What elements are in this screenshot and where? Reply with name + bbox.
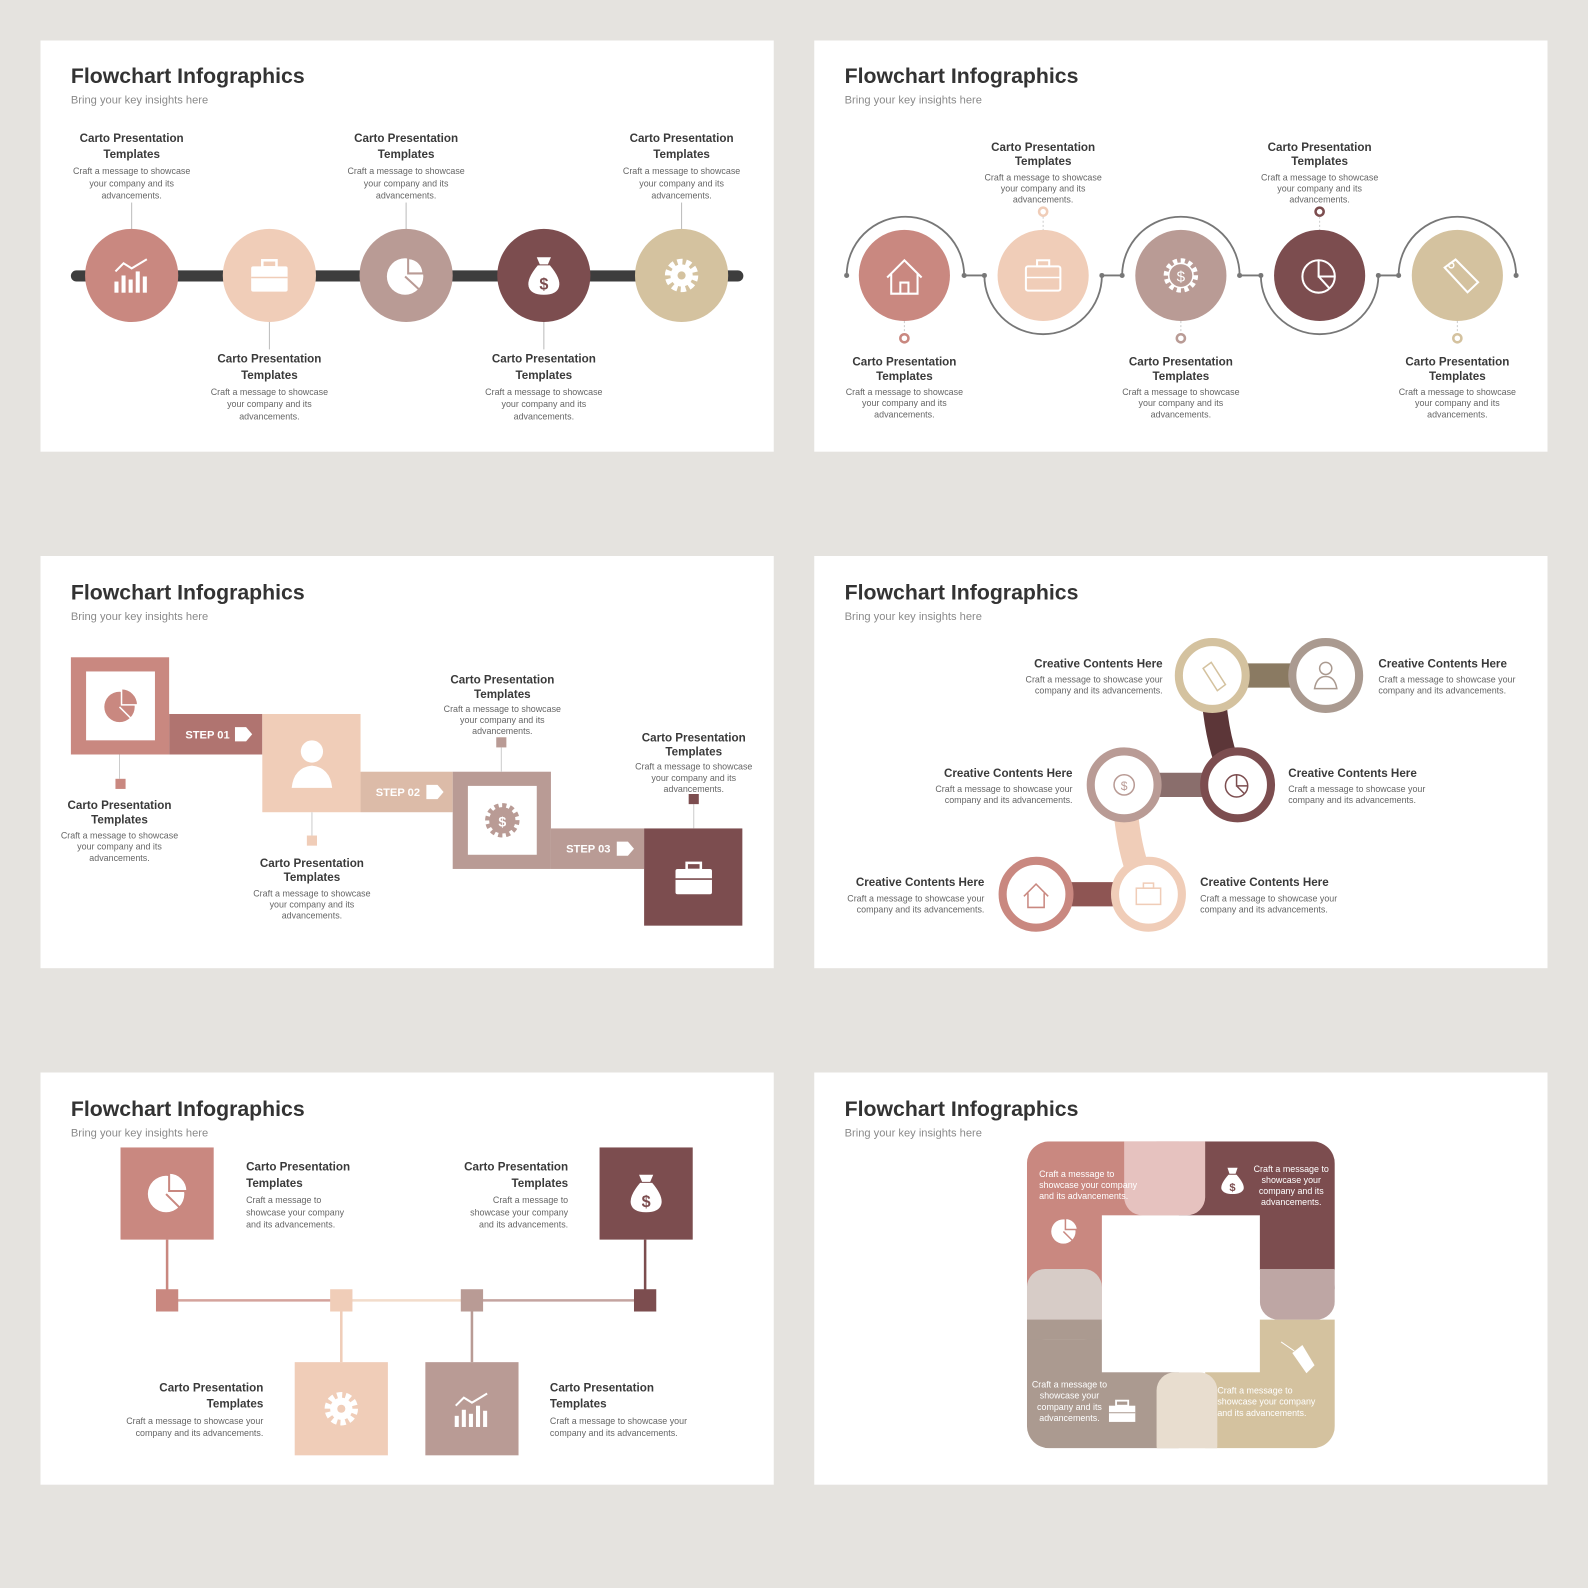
text blocks: Carto Presentation (991, 141, 1095, 154)
panel: slide 4 chain circles: Craft a message to showcase your (1288, 784, 1425, 794)
connectors (1036, 676, 1326, 894)
text blocks: advancements. (376, 190, 436, 200)
panel: slide 5 branch timeline: company and its advancements. (136, 1428, 263, 1438)
text blocks: Templates (474, 688, 531, 701)
text blocks: company and its advancements. (1035, 686, 1163, 696)
text blocks: your company and its (460, 715, 545, 725)
text blocks: Craft a message to showcase your (1026, 675, 1163, 685)
markers (900, 208, 1461, 342)
text blocks: Craft a message to showcase (846, 387, 963, 397)
text blocks: Templates (284, 871, 340, 884)
icon: gear ring (1091, 751, 1158, 818)
text: top-left (1039, 1169, 1138, 1201)
text blocks: Carto Presentation (642, 731, 746, 744)
text blocks: advancements. (651, 190, 712, 200)
text blocks: Templates (516, 369, 572, 382)
text blocks: and its advancements. (246, 1219, 335, 1229)
text blocks: Craft a message to showcase (253, 888, 371, 898)
text: top-right: company and its (1259, 1186, 1324, 1196)
text blocks: Carto Presentation (80, 132, 184, 145)
text blocks: company and its advancements. (857, 904, 984, 914)
text blocks: Carto Presentation (1129, 356, 1233, 369)
text blocks: Templates (1153, 370, 1209, 383)
text: bottom-right: showcase your company (1217, 1397, 1316, 1407)
text blocks: your company and its (77, 842, 162, 852)
text: bottom-left: showcase your (1040, 1391, 1099, 1401)
text blocks: Craft a message to showcase (211, 387, 328, 397)
title: Flowchart Infographics (71, 1097, 305, 1121)
panel: slide 2 wave circles (814, 41, 1547, 452)
text blocks: Carto Presentation (67, 799, 172, 812)
panel: slide 5 branch timeline: Carto Presentation (464, 1161, 568, 1174)
text blocks: Carto Presentation (246, 1161, 350, 1174)
text: top-right: advancements. (1261, 1197, 1321, 1207)
text blocks: Templates (378, 148, 434, 161)
text blocks: advancements. (239, 411, 300, 421)
icon: gear square (453, 772, 551, 869)
text blocks: Craft a message to showcase your (935, 784, 1073, 794)
connector lines (167, 1240, 645, 1362)
text blocks: Creative Contents Here (856, 876, 985, 889)
icon: chart circle (85, 229, 178, 322)
panel: slide 5 branch timeline (41, 1073, 774, 1485)
icon: gear square: $ (498, 814, 506, 830)
text blocks: Templates (1429, 370, 1486, 383)
text blocks: Templates (550, 1398, 607, 1411)
text blocks: Carto Presentation (354, 132, 458, 145)
panel: slide 6 square cycle (814, 1073, 1547, 1485)
text blocks: your company and its (1139, 398, 1224, 408)
icon: money square: $ (642, 1193, 651, 1211)
step bars (169, 714, 644, 869)
text: bottom-left: company and its (1037, 1402, 1102, 1412)
text: top-right (1254, 1164, 1329, 1207)
icon: tag ring (1179, 642, 1246, 709)
icon: house circle (859, 230, 950, 321)
text blocks: advancements. (1151, 409, 1211, 419)
panel: slide 4 chain circles: company and its advancements. (1200, 904, 1328, 914)
text blocks: Craft a message to showcase (1399, 387, 1516, 397)
text: bottom-left: advancements. (1039, 1413, 1100, 1423)
text blocks: your company and its (364, 178, 449, 188)
connectors (120, 747, 694, 836)
text: top-right: showcase your (1262, 1175, 1321, 1185)
panel: slide 5 branch timeline: Craft a message to (493, 1195, 568, 1205)
text blocks (847, 657, 1163, 914)
text blocks (246, 1161, 687, 1438)
text blocks: your company and its (1001, 183, 1086, 193)
panel: slide 5 branch timeline: showcase your company (470, 1207, 569, 1217)
text blocks: Carto Presentation (217, 353, 321, 366)
text blocks: Craft a message to showcase your (847, 893, 984, 903)
text blocks: Carto Presentation (1405, 356, 1509, 369)
text blocks: Craft a message to showcase your (550, 1416, 687, 1426)
icon: pie square (121, 1147, 214, 1240)
panel: slide 4 chain circles: company and its advancements. (1288, 795, 1416, 805)
text blocks: company and its advancements. (945, 795, 1073, 805)
text blocks: showcase your company (246, 1207, 345, 1217)
text blocks: Templates (1291, 155, 1348, 168)
subtitle: Bring your key insights here (71, 94, 208, 106)
icon: gear ring: $ (1121, 779, 1128, 793)
panel: slide 5 branch timeline: Carto Presentation (159, 1382, 263, 1395)
panel: slide 5 branch timeline: and its advancements. (479, 1219, 568, 1229)
text: top-left: showcase your company (1039, 1180, 1138, 1190)
text blocks: advancements. (1289, 195, 1350, 205)
text: top-left: Craft a message to (1039, 1169, 1114, 1179)
icon: pie (1051, 1218, 1078, 1244)
title: Flowchart Infographics (845, 581, 1078, 605)
icon: briefcase ring (1115, 861, 1182, 928)
subtitle: Bring your key insights here (845, 1127, 982, 1139)
text: top-left: and its advancements. (1039, 1191, 1128, 1201)
text blocks: Templates (241, 369, 298, 382)
panel: slide 4 chain circles: company and its advancements. (1378, 686, 1506, 696)
text blocks: advancements. (874, 409, 935, 419)
text: bottom-left: Craft a message to (1032, 1379, 1107, 1389)
text blocks: Carto Presentation (1268, 141, 1372, 154)
panel: slide 1 circles timeline (41, 41, 774, 452)
icon: pie circle (1274, 230, 1365, 321)
icon: briefcase circle (998, 230, 1089, 321)
title: Flowchart Infographics (71, 581, 305, 605)
icon: house ring (1003, 861, 1069, 928)
text blocks: Craft a message to showcase (1261, 172, 1378, 182)
text blocks: Craft a message to showcase (623, 166, 740, 176)
icon: gear dollar circle (1135, 230, 1226, 321)
timeline bar (71, 270, 743, 282)
icon: gear circle (635, 229, 728, 322)
text blocks: Craft a message to showcase (1122, 387, 1240, 397)
text blocks: Carto Presentation (492, 353, 596, 366)
text blocks: your company and its (1277, 183, 1362, 193)
subtitle: Bring your key insights here (845, 611, 982, 623)
text: bottom-right (1217, 1386, 1316, 1418)
icon: person ring (1292, 642, 1359, 709)
step bars: STEP 03 (566, 844, 610, 856)
text blocks: advancements. (1013, 195, 1073, 205)
subtitle: Bring your key insights here (71, 1127, 208, 1139)
icon: money bag: $ (1229, 1182, 1236, 1194)
text blocks: Creative Contents Here (944, 767, 1073, 780)
icon: pie square (71, 657, 169, 755)
text blocks: Templates (246, 1177, 303, 1190)
panel: slide 5 branch timeline: Templates (207, 1398, 263, 1411)
text blocks: Templates (103, 148, 160, 161)
text blocks: Templates (665, 746, 722, 759)
text blocks: Craft a message to showcase (635, 762, 752, 772)
text blocks: your company and its (639, 178, 724, 188)
icon: briefcase square (644, 828, 742, 926)
text: bottom-right: and its advancements. (1217, 1408, 1306, 1418)
icon: money bag circle (497, 229, 590, 322)
text blocks (73, 132, 740, 421)
text blocks: advancements. (282, 911, 342, 921)
subtitle: Bring your key insights here (71, 611, 208, 623)
text blocks: Carto Presentation (852, 356, 956, 369)
text blocks: advancements. (101, 190, 162, 200)
wave line (847, 217, 1516, 334)
panel: slide 4 chain circles (814, 556, 1547, 968)
text blocks: advancements. (514, 411, 574, 421)
icon: gear dollar circle: $ (1177, 269, 1186, 286)
text blocks: your company and its (502, 399, 587, 409)
panel: slide 4 chain circles: Craft a message to showcase your (1200, 893, 1337, 903)
text blocks: Carto Presentation (550, 1382, 654, 1395)
text blocks: your company and its (1415, 398, 1500, 408)
text blocks: Craft a message to (246, 1195, 321, 1205)
text blocks: advancements. (664, 784, 724, 794)
panel: slide 5 branch timeline: Templates (512, 1177, 568, 1190)
text blocks: your company and its (89, 178, 175, 188)
icon: briefcase circle (223, 229, 316, 322)
icon: pie ring (1204, 751, 1271, 818)
text blocks: Craft a message to showcase (347, 166, 465, 176)
text blocks: your company and its (227, 399, 312, 409)
title: Flowchart Infographics (71, 64, 305, 88)
text blocks: your company and its (651, 773, 737, 783)
text blocks: Craft a message to showcase (61, 831, 178, 841)
panel: slide 4 chain circles: Craft a message to showcase your (1378, 675, 1516, 685)
text blocks: your company and its (270, 899, 355, 909)
text blocks: advancements. (89, 853, 150, 863)
text blocks (846, 141, 1516, 419)
panel: slide 4 chain circles: Creative Contents Here (1200, 876, 1329, 889)
text: bottom-left (1032, 1379, 1107, 1423)
title: Flowchart Infographics (845, 1097, 1078, 1121)
panel: slide 4 chain circles: Creative Contents Here (1378, 657, 1507, 670)
text blocks: Craft a message to showcase (73, 166, 190, 176)
subtitle: Bring your key insights here (845, 94, 982, 106)
text blocks: Carto Presentation (630, 132, 734, 145)
icon: money square (600, 1147, 693, 1240)
cycle frame (1027, 1124, 1335, 1463)
icon: briefcase (1109, 1401, 1135, 1422)
icon: money bag circle: $ (539, 276, 548, 294)
text blocks: Creative Contents Here (1034, 657, 1163, 670)
text blocks: Templates (91, 813, 148, 826)
title: Flowchart Infographics (845, 64, 1078, 88)
text: top-right: Craft a message to (1254, 1164, 1329, 1174)
icon: money bag (1221, 1168, 1244, 1194)
text blocks: Carto Presentation (260, 857, 364, 870)
text blocks: advancements. (1427, 409, 1488, 419)
icon: gear square (295, 1362, 388, 1455)
text: bottom-right: Craft a message to (1217, 1386, 1293, 1396)
text blocks: Templates (876, 370, 933, 383)
step bars: STEP 01 (185, 729, 230, 741)
icon: tag (1281, 1342, 1315, 1373)
text blocks: advancements. (472, 726, 533, 736)
icon: tag circle (1412, 230, 1503, 321)
text blocks: Carto Presentation (450, 674, 554, 687)
text blocks: Templates (653, 148, 710, 161)
step bars: STEP 02 (376, 787, 420, 799)
icon: person square (262, 714, 361, 812)
panel: slide 4 chain circles: Creative Contents Here (1288, 767, 1417, 780)
icon: pie circle (360, 229, 453, 322)
text blocks (61, 674, 752, 921)
text blocks: company and its advancements. (550, 1428, 678, 1438)
text blocks: your company and its (862, 398, 947, 408)
text blocks: Craft a message to showcase (444, 704, 561, 714)
text blocks: Craft a message to showcase (984, 172, 1102, 182)
text blocks: Craft a message to showcase (485, 387, 603, 397)
icon: chart square (425, 1362, 519, 1455)
panel: slide 3 staircase steps (41, 556, 774, 968)
text blocks: Templates (1015, 155, 1071, 168)
panel: slide 5 branch timeline: Craft a message to showcase your (126, 1416, 263, 1426)
